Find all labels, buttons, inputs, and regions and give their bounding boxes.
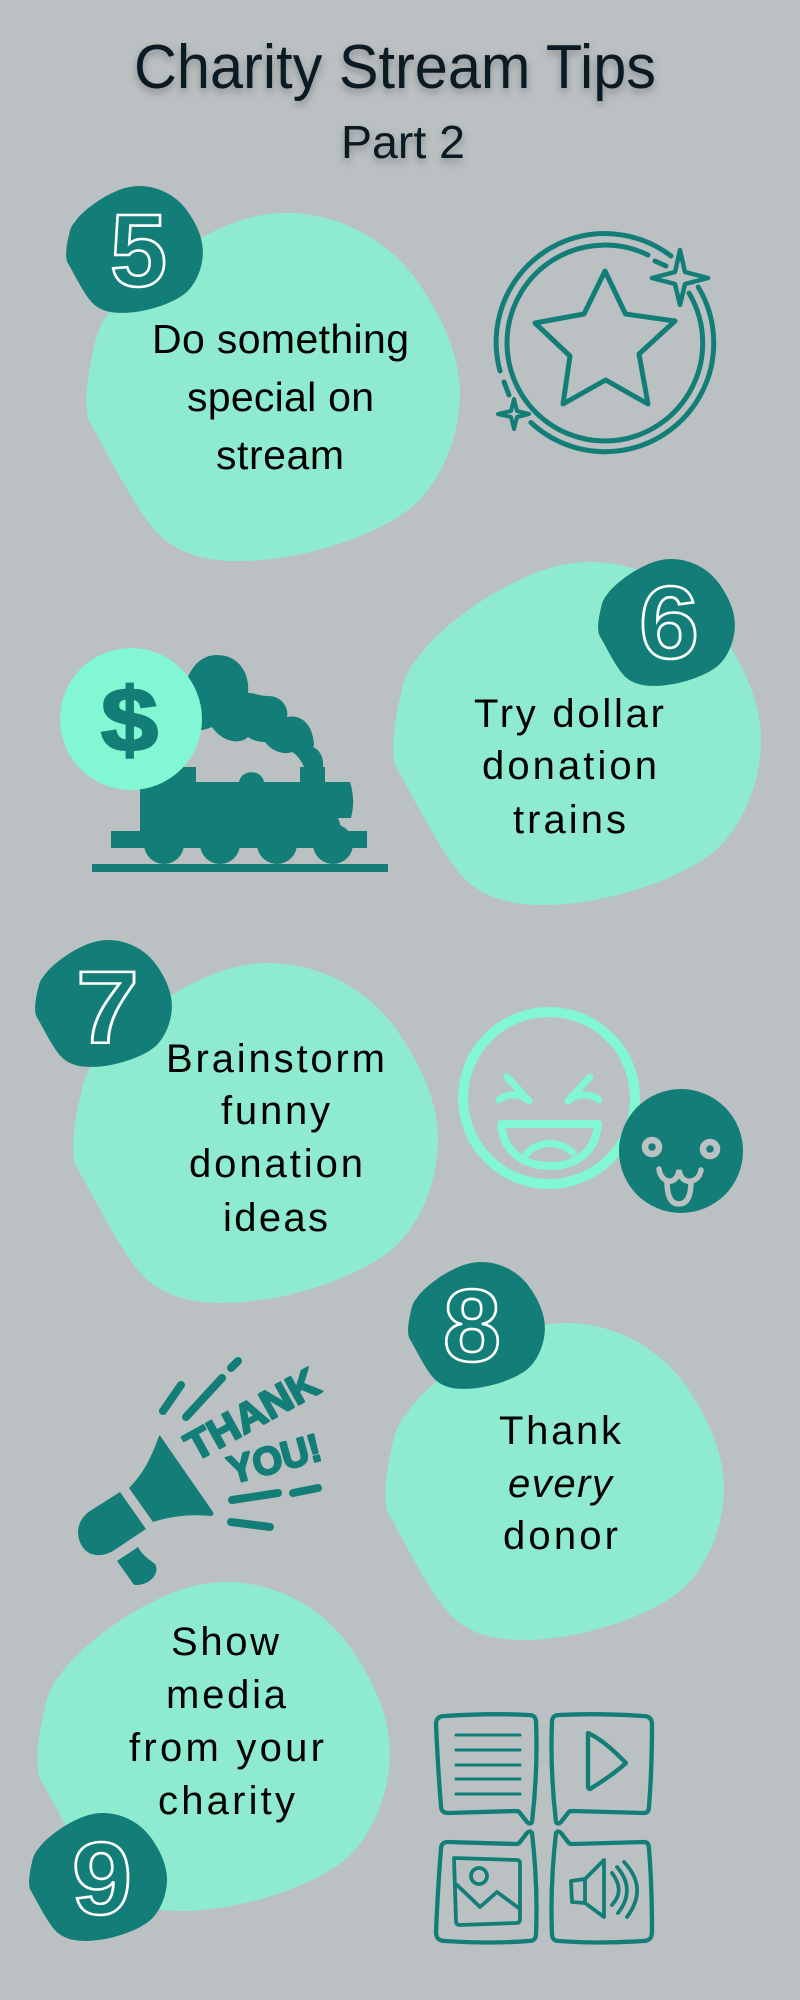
tip 7 text: donation xyxy=(189,1142,363,1186)
tip 9 text: Show xyxy=(171,1620,279,1664)
video bubble xyxy=(552,1714,652,1824)
tip 5 text: stream xyxy=(216,432,344,478)
subtitle: Part 2 xyxy=(341,116,465,168)
icon: megaphone thank you xyxy=(78,1359,327,1585)
tip 6 blob xyxy=(393,562,761,905)
sound lines xyxy=(163,1361,318,1527)
smoke xyxy=(184,655,323,767)
panel: tip 6 xyxy=(393,559,761,905)
tip 8 text: every xyxy=(508,1462,615,1506)
megaphone xyxy=(78,1435,213,1585)
tip 9 badge xyxy=(29,1813,167,1941)
star xyxy=(535,271,675,404)
thank you lettering: THANK xyxy=(177,1359,327,1470)
locomotive body xyxy=(140,767,353,835)
inner ring xyxy=(507,245,703,441)
panel: tip 5 xyxy=(66,186,460,561)
tip 5 text: Do something xyxy=(152,316,409,362)
title block xyxy=(134,33,656,168)
outer ring xyxy=(496,234,714,452)
icon: donation train xyxy=(60,648,388,872)
tip 7 text: Brainstorm xyxy=(166,1037,385,1081)
number 8: 8 xyxy=(443,1268,501,1383)
tip 7 text: ideas xyxy=(223,1196,328,1240)
tip 9 text: media xyxy=(166,1673,287,1717)
number 5: 5 xyxy=(110,193,167,308)
wheels xyxy=(144,824,353,864)
tip 6 badge xyxy=(598,559,735,686)
tip 5 text: special on xyxy=(187,374,374,420)
tip 8 text: donor xyxy=(503,1514,618,1558)
tip 6 text: trains xyxy=(513,798,626,842)
dollar coin xyxy=(60,648,202,790)
large sparkle xyxy=(652,250,708,305)
text bubble xyxy=(436,1714,536,1824)
dollar sign: $ xyxy=(101,671,158,771)
number 7: 7 xyxy=(76,950,139,1065)
icon: laughing emojis xyxy=(463,1012,743,1213)
tongue-out face xyxy=(619,1089,743,1213)
panel: tip 9 xyxy=(29,1582,390,1941)
tip 7 badge xyxy=(35,940,172,1067)
tip 9 blob xyxy=(37,1582,390,1911)
tip 7 text: funny xyxy=(221,1089,330,1133)
tip 9 text: charity xyxy=(158,1779,295,1823)
tip 6 text: donation xyxy=(482,744,657,788)
number 9: 9 xyxy=(72,1821,132,1936)
icon: media speech bubbles xyxy=(436,1714,652,1942)
panel: tip 8 xyxy=(385,1262,724,1640)
tip 8 blob xyxy=(385,1323,724,1640)
tip 5 blob xyxy=(86,213,460,561)
audio bubble xyxy=(552,1832,652,1942)
panel: tip 7 xyxy=(35,940,438,1303)
icon: star in rings xyxy=(496,234,714,452)
rail xyxy=(92,864,388,872)
tip 8 badge xyxy=(408,1262,545,1389)
image bubble xyxy=(436,1832,536,1942)
tip 9 text: from your xyxy=(129,1726,324,1770)
platform xyxy=(111,831,367,848)
tip 8 text: Thank xyxy=(499,1409,622,1453)
number 6: 6 xyxy=(639,565,699,680)
small sparkle xyxy=(498,399,529,429)
tip 6 text: Try dollar xyxy=(474,692,664,736)
laughing face xyxy=(463,1012,635,1184)
thank you lettering: YOU! xyxy=(223,1427,326,1493)
title: Charity Stream Tips xyxy=(134,33,656,102)
tip 7 blob xyxy=(73,963,438,1303)
tip 5 badge xyxy=(66,186,203,313)
